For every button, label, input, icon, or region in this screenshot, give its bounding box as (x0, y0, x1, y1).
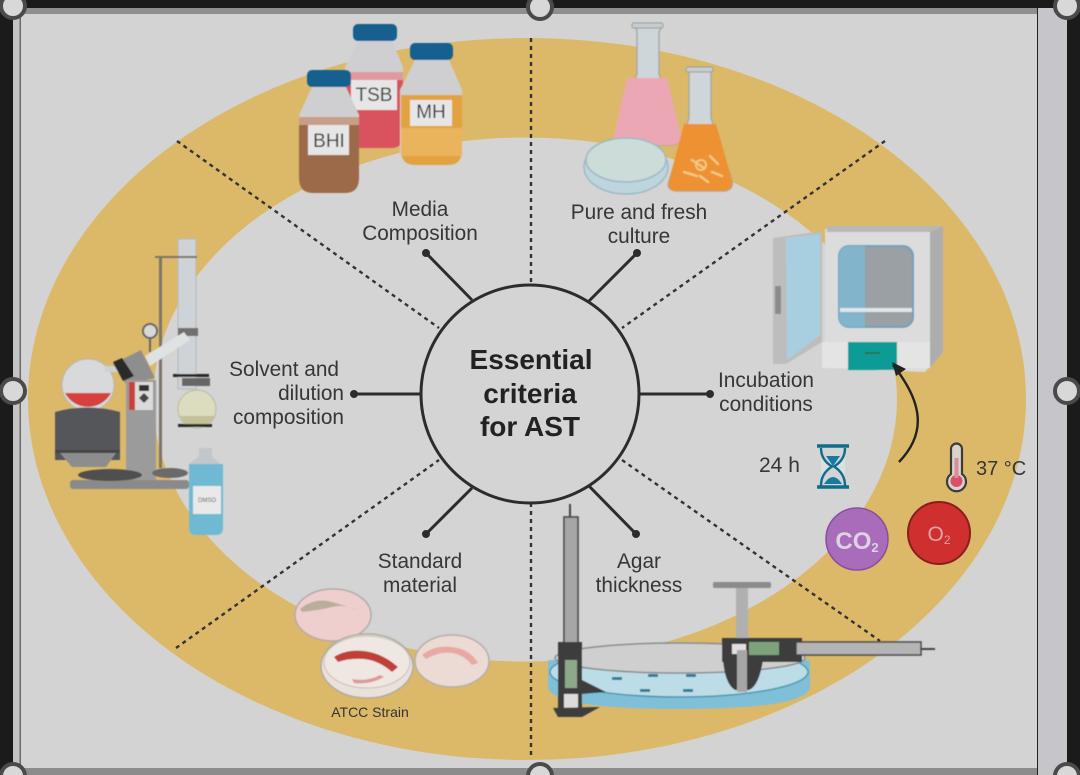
label: incubation conditions (718, 369, 814, 416)
arrow to incubator (892, 362, 918, 462)
dish: right (415, 635, 489, 687)
bottle: BHI (299, 70, 359, 193)
incubator base with teal panel (822, 342, 930, 368)
icon: incubator (773, 226, 943, 372)
icon: O2 bubble: 2 (944, 533, 951, 547)
center hub (421, 285, 639, 503)
label: standard material (378, 550, 462, 597)
receiving flask (173, 374, 216, 428)
bottle: MH (400, 43, 462, 165)
incubator window (839, 246, 913, 327)
condenser column (155, 239, 198, 468)
bottle: MH: MH (416, 102, 446, 123)
label: solvent and dilution composition: composition (233, 406, 344, 429)
dish: top (295, 589, 371, 641)
icon: CO2 bubble (826, 508, 888, 570)
DMSO bottle (189, 448, 223, 535)
icon: O2 bubble: O (927, 523, 944, 546)
flask: orange (668, 67, 732, 191)
label: ATCC Strain: ATCC Strain (331, 704, 409, 720)
condition: 37 °C (947, 444, 1026, 491)
label: agar thickness: Agar (617, 550, 661, 573)
icon: flasks and petri dish (584, 23, 732, 194)
incubator door (773, 231, 822, 364)
label: standard material: Standard (378, 550, 462, 573)
label: incubation conditions: Incubation (718, 369, 814, 392)
base (70, 468, 189, 489)
label: agar thickness (596, 550, 682, 597)
spokes (352, 250, 712, 536)
label: pure and fresh culture: culture (608, 225, 670, 248)
criterion labels (229, 198, 814, 597)
condition: 37 °C: 37 °C (976, 458, 1026, 480)
dashed sector dividers (176, 38, 885, 758)
label: standard material: material (383, 574, 457, 597)
incubator body (825, 226, 943, 372)
icon: rotary evaporator (55, 239, 223, 535)
bottle: BHI: BHI (313, 131, 345, 152)
petri dish with agar (548, 642, 810, 709)
hub title (470, 344, 592, 442)
evaporator flask (62, 359, 123, 411)
label: solvent and dilution composition (229, 358, 344, 429)
label: pure and fresh culture: Pure and fresh (571, 201, 707, 224)
bottle: TSB (345, 24, 403, 148)
label: media composition: Composition (362, 222, 478, 245)
condition: 24 h: 24 h (759, 454, 800, 477)
vertical caliper (553, 504, 606, 717)
icon: O2 bubble (908, 502, 970, 564)
hub title: for AST (480, 411, 580, 442)
bottle: TSB: TSB (356, 85, 392, 106)
hub title: criteria (483, 378, 577, 409)
dish: front (321, 634, 413, 698)
label: media composition: Media (392, 198, 449, 221)
flask: pink (614, 23, 681, 145)
icon: thermometer (947, 444, 966, 491)
label: pure and fresh culture (571, 201, 707, 248)
water bath (55, 408, 120, 467)
hub title: Essential (470, 344, 592, 375)
label: incubation conditions: conditions (719, 393, 813, 416)
label: solvent and dilution composition: Solvent and (229, 358, 339, 381)
icon: ATCC strain petri dishes (295, 589, 489, 720)
icon: caliper measuring agar (548, 504, 935, 717)
icon: CO2 bubble: CO (835, 528, 871, 555)
DMSO bottle: DMSO (198, 498, 216, 504)
icon: CO2 bubble: 2 (871, 540, 879, 555)
vapour duct and gauge (143, 324, 190, 366)
icon: media bottles (299, 24, 462, 193)
condition: 24 h (759, 446, 849, 487)
label: agar thickness: thickness (596, 574, 682, 597)
icon: hourglass (817, 446, 849, 487)
motor unit (113, 350, 156, 480)
petri dish (584, 138, 668, 194)
horizontal caliper (713, 582, 935, 692)
label: media composition (362, 198, 478, 245)
label: solvent and dilution composition: dilution (278, 382, 344, 405)
